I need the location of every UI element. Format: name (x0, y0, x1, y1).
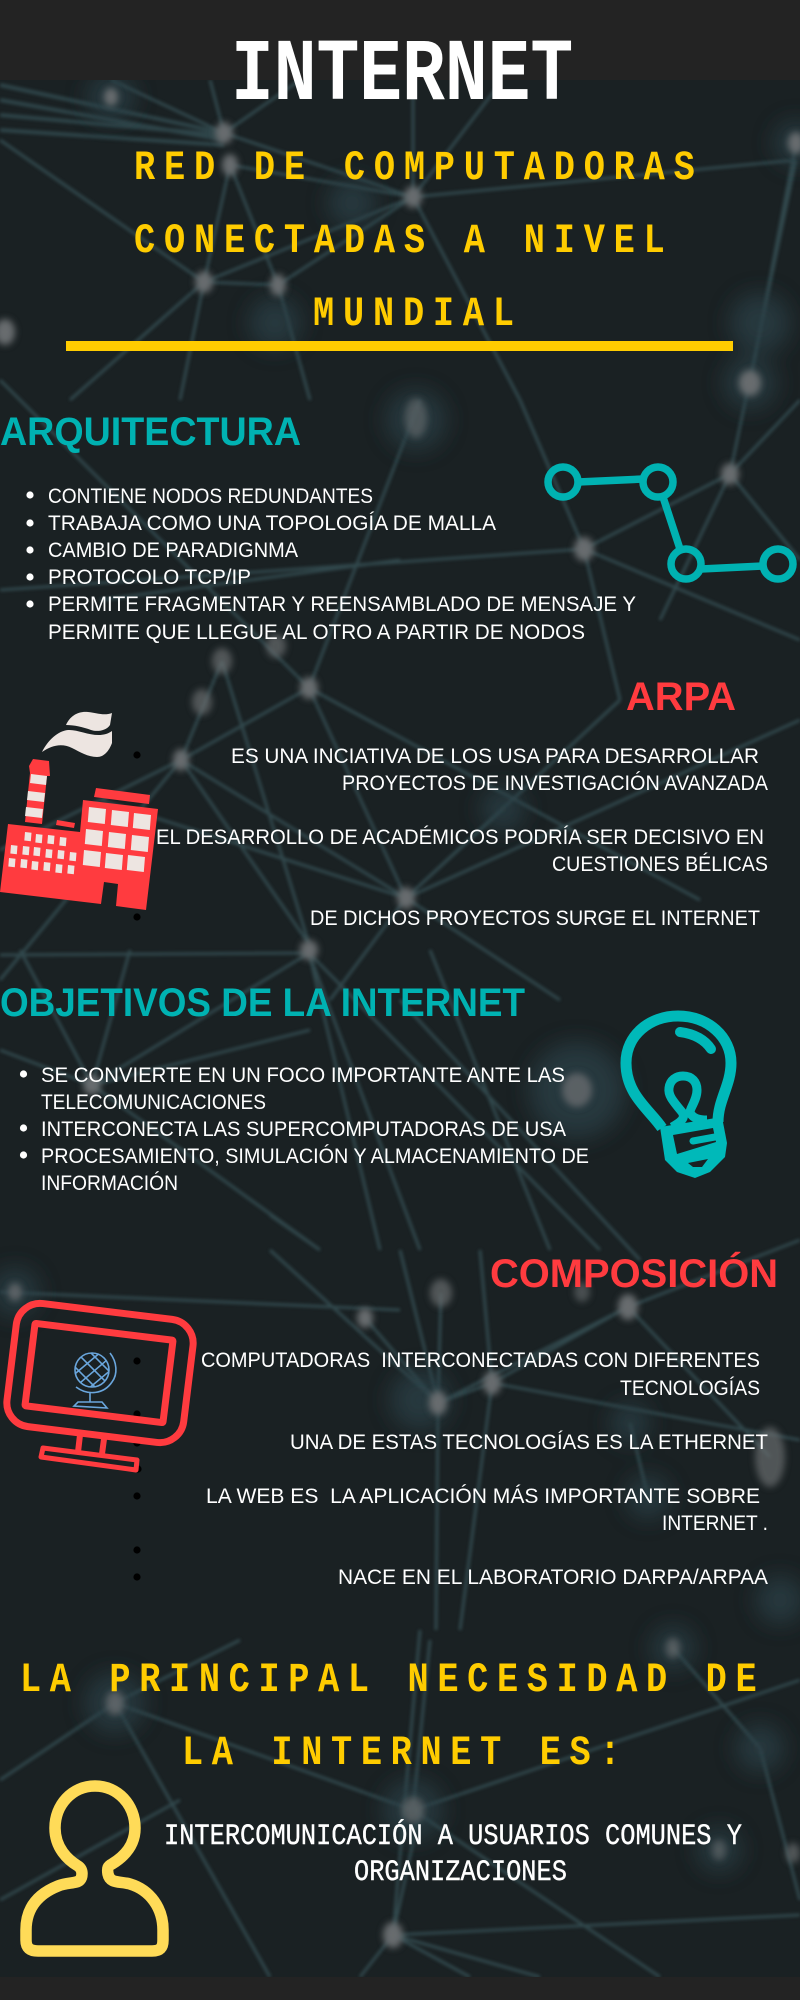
subtitle: MUNDIAL (313, 290, 523, 338)
list: arpa: DE DICHOS PROYECTOS SURGE EL INTERNET (310, 907, 760, 930)
icon: computer monitor with globe (4, 1301, 196, 1470)
list: objetivos: INFORMACIÓN (41, 1172, 178, 1195)
heading: principal necesidad: LA INTERNET ES: (182, 1729, 629, 1777)
subtitle: CONECTADAS A NIVEL (134, 217, 674, 265)
list: arquitectura (26, 485, 636, 644)
yellow divider bar (66, 341, 733, 351)
list: objetivos: INTERCONECTA LAS SUPERCOMPUTADORAS DE USA (41, 1118, 566, 1141)
heading: arquitectura: ARQUITECTURA (0, 410, 301, 454)
heading: principal necesidad: LA PRINCIPAL NECESIDAD DE (20, 1656, 765, 1704)
list: composicion: NACE EN EL LABORATORIO DARPA/ARPAA (338, 1566, 768, 1589)
subtitle (134, 144, 704, 338)
list: composicion: UNA DE ESTAS TECNOLOGÍAS ES LA ETHERNET (290, 1431, 768, 1454)
list: arpa: ES UNA INCIATIVA DE LOS USA PARA DESARROLLAR (231, 745, 759, 768)
list: arquitectura: TRABAJA COMO UNA TOPOLOGÍA DE MALLA (48, 512, 496, 535)
subtitle: RED DE COMPUTADORAS (134, 144, 704, 192)
list: objetivos (20, 1064, 589, 1195)
list: composicion: LA WEB ES LA APLICACIÓN MÁS IMPORTANTE SOBRE (206, 1485, 760, 1508)
list: arpa: CUESTIONES BÉLICAS (552, 853, 768, 876)
list: objetivos: PROCESAMIENTO, SIMULACIÓN Y ALMACENAMIENTO DE (41, 1145, 589, 1168)
list: composicion: COMPUTADORAS INTERCONECTADAS CON DIFERENTES (201, 1349, 760, 1372)
closing statement: INTERCOMUNICACIÓN A USUARIOS COMUNES Y (164, 1818, 742, 1854)
list: composicion (133, 1349, 768, 1589)
list: arquitectura: PROTOCOLO TCP/IP (48, 566, 251, 589)
closing statement (164, 1818, 742, 1890)
list: objetivos: SE CONVIERTE EN UN FOCO IMPORTANTE ANTE LAS (41, 1064, 565, 1087)
heading: objetivos: OBJETIVOS DE LA INTERNET (0, 981, 525, 1025)
bottom band (0, 1977, 800, 2000)
list: arquitectura: CAMBIO DE PARADIGNMA (48, 539, 298, 562)
heading: arpa: ARPA (626, 675, 736, 719)
closing statement: ORGANIZACIONES (354, 1856, 567, 1890)
list: arpa: EL DESARROLLO DE ACADÉMICOS PODRÍA SER DECISIVO EN (156, 826, 764, 849)
heading: composicion: COMPOSICIÓN (490, 1250, 778, 1296)
list: composicion: INTERNET . (662, 1512, 768, 1535)
list: arquitectura: CONTIENE NODOS REDUNDANTES (48, 485, 373, 508)
list: arpa: PROYECTOS DE INVESTIGACIÓN AVANZADA (342, 772, 768, 795)
list: arpa (133, 745, 768, 930)
top band (0, 0, 800, 80)
icon: factory (0, 712, 158, 910)
list: arquitectura: PERMITE QUE LLEGUE AL OTRO A PARTIR DE NODOS (48, 621, 585, 644)
list: composicion: TECNOLOGÍAS (620, 1377, 760, 1400)
icon: light bulb (626, 1016, 731, 1178)
icon: user (26, 1786, 163, 1951)
list: objetivos: TELECOMUNICACIONES (41, 1091, 266, 1114)
icon: network nodes (548, 467, 793, 579)
heading: principal necesidad (20, 1656, 765, 1777)
title: INTERNET (231, 26, 573, 126)
list: arquitectura: PERMITE FRAGMENTAR Y REENSAMBLADO DE MENSAJE Y (48, 593, 636, 616)
